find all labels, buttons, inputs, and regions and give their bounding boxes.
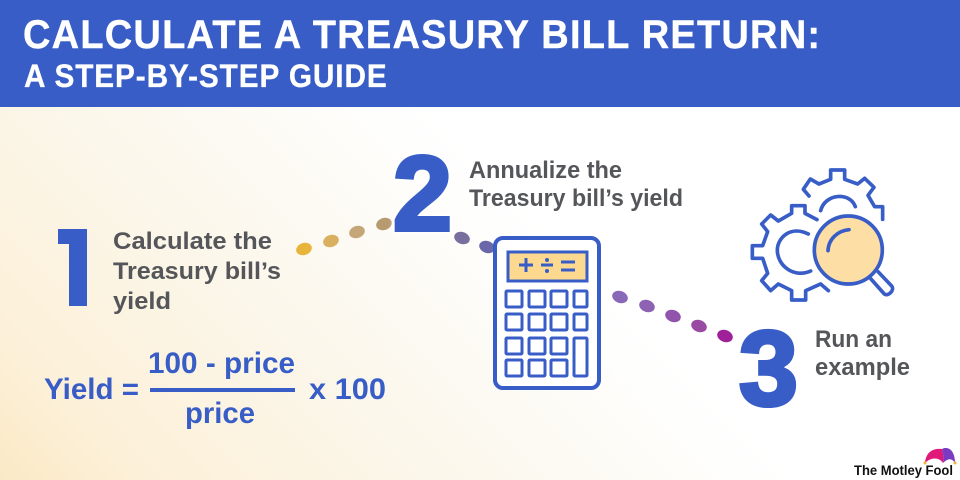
dotted path from step 2 to step 3 xyxy=(452,230,735,344)
magnifier handle xyxy=(871,272,893,295)
step 3 label: Run an xyxy=(815,326,892,353)
step 3 label xyxy=(815,326,910,381)
dotted path from step 1 to step 2 xyxy=(295,216,393,257)
logo wordmark: The Motley Fool xyxy=(854,462,953,478)
step 1 label: Treasury bill’s xyxy=(113,258,281,285)
yield formula: price xyxy=(185,397,255,430)
calculator display xyxy=(508,252,587,281)
icon: calculator xyxy=(495,238,599,388)
step 2 label: Annualize the xyxy=(469,157,622,184)
background gradient xyxy=(0,107,960,480)
yield formula: x 100 xyxy=(309,373,386,406)
step 1 number: 1 xyxy=(45,207,106,330)
step 3 number: 3 xyxy=(739,310,798,428)
logo jester hat xyxy=(924,448,956,464)
step 1 label: Calculate the xyxy=(113,228,272,255)
step 2 label xyxy=(469,157,683,212)
step 1 label xyxy=(113,228,281,315)
title: CALCULATE A TREASURY BILL RETURN: xyxy=(23,13,820,57)
step 1 label: yield xyxy=(113,288,171,315)
step 3 label: example xyxy=(815,354,910,381)
header banner xyxy=(0,0,960,107)
icon: gears and magnifying glass xyxy=(752,170,893,300)
magnifier lens xyxy=(814,216,882,284)
yield formula: 100 - price xyxy=(148,347,295,380)
subtitle: A STEP-BY-STEP GUIDE xyxy=(24,58,387,94)
step 2 label: Treasury bill’s yield xyxy=(469,185,683,212)
logo: The Motley Fool xyxy=(854,448,956,478)
step 2 number: 2 xyxy=(393,135,452,253)
yield formula xyxy=(44,347,386,430)
calculator symbols xyxy=(519,258,575,272)
yield formula: Yield = xyxy=(44,373,139,406)
